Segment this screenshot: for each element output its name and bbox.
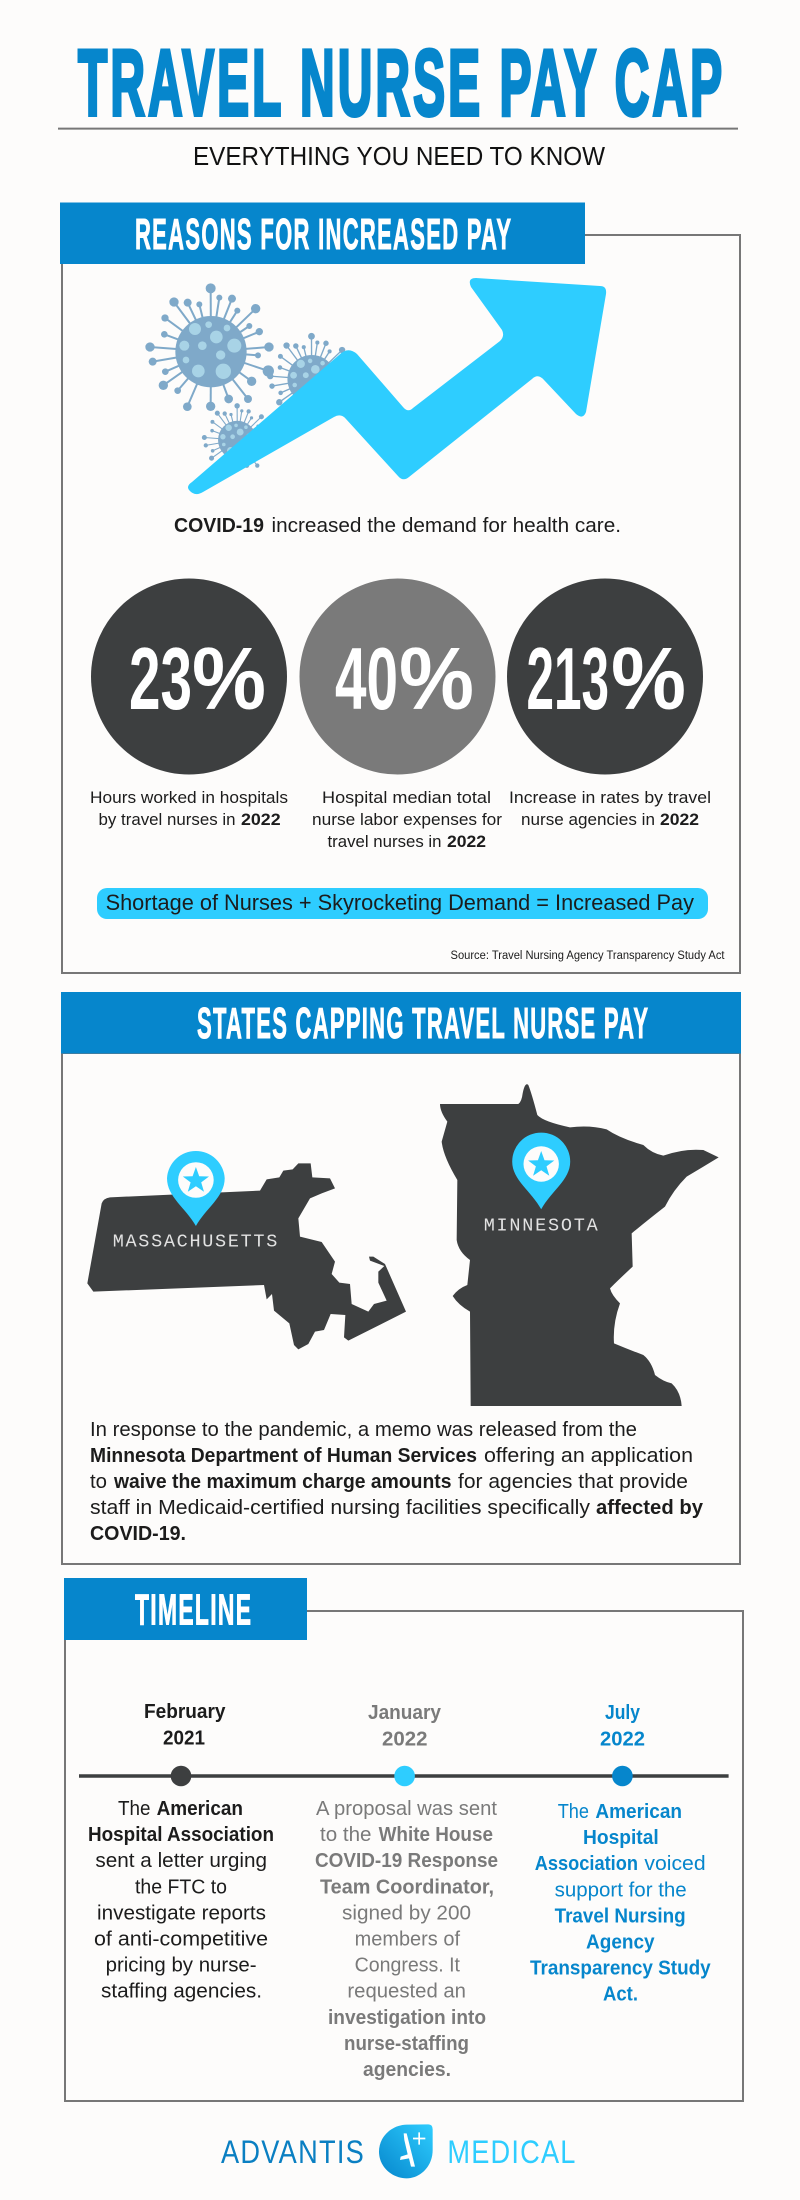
heading: reasons for increased pay: REASONS FOR INCREASED PAY (135, 211, 511, 259)
event: january 2022: COVID-19 Response (315, 1850, 498, 1872)
label: minnesota: MINNESOTA (484, 1216, 599, 1237)
event: january 2022: to the (320, 1824, 372, 1846)
text block: memo paragraph: offering an application (484, 1445, 693, 1467)
icon: coronavirus cluster (145, 283, 355, 472)
stat: 40% (300, 578, 502, 851)
event: january 2022: investigation into (328, 2007, 486, 2029)
event: july 2022: Transparency Study (530, 1958, 712, 1980)
stat: 40%: 40 (335, 629, 398, 728)
panel: reasons for increased pay (60, 202, 740, 973)
text block: memo paragraph: COVID-19. (90, 1523, 186, 1545)
event: july 2022: July (605, 1702, 641, 1724)
text block: memo paragraph: for agencies that provide (458, 1471, 688, 1493)
heading: timeline: TIMELINE (135, 1586, 251, 1635)
source note: Source: Travel Nursing Agency Transparency Study Act (450, 950, 725, 962)
stat: 213% (507, 578, 711, 829)
event: july 2022: Travel Nursing (555, 1905, 686, 1927)
stat: 40%: nurse labor expenses for (312, 810, 502, 829)
event: july 2022: The (558, 1801, 589, 1823)
stat: 40%: travel nurses in (328, 832, 442, 851)
event: february 2021: of anti-competitive (94, 1928, 268, 1950)
event: january 2022: White House (379, 1824, 493, 1846)
event: january 2022: Team Coordinator, (320, 1876, 494, 1898)
title: TRAVEL NURSE PAY CAP (78, 29, 722, 135)
text block: memo paragraph (90, 1419, 704, 1545)
stat: 23%: by travel nurses in (98, 810, 236, 829)
timeline axis (79, 1774, 729, 1778)
stat: 23%: % (192, 629, 266, 728)
text block: memo paragraph: Minnesota Department of Human Services (90, 1445, 477, 1467)
event: july 2022: voiced (644, 1853, 706, 1875)
event: january 2022: nurse-staffing (344, 2033, 469, 2055)
event: january 2022: signed by 200 (342, 1902, 471, 1924)
stat: 213%: 2022 (660, 810, 699, 829)
event: january 2022: requested an (347, 1981, 466, 2003)
stat: 213%: Increase in rates by travel (509, 788, 711, 807)
icon: minnesota pin (512, 1133, 570, 1209)
heading: timeline (64, 1578, 307, 1640)
event: january 2022 (315, 1702, 498, 2081)
heading: reasons for increased pay (60, 202, 585, 264)
event: january 2022: members of (355, 1928, 460, 1950)
heading: states capping travel nurse pay (61, 992, 741, 1054)
event: february 2021: the FTC to (135, 1876, 227, 1898)
heading: states capping travel nurse pay: STATES CAPPING TRAVEL NURSE PAY (197, 1000, 648, 1048)
event: july 2022 (530, 1702, 712, 2006)
panel: timeline (64, 1578, 743, 2101)
panel: states capping travel nurse pay (61, 992, 741, 1564)
event: july 2022: 2022 (600, 1729, 645, 1751)
text block: memo paragraph: In response to the pandemic, a memo was released from the (90, 1419, 637, 1441)
event: february 2021: February (144, 1701, 226, 1723)
event: february 2021: American (157, 1798, 243, 1820)
event: july 2022: Hospital (583, 1827, 659, 1849)
event: february 2021 (88, 1701, 274, 2003)
event: february 2021: The (118, 1798, 150, 1820)
event: february 2021: sent a letter urging (95, 1850, 267, 1872)
subtitle: EVERYTHING YOU NEED TO KNOW (193, 141, 605, 171)
event: february 2021: investigate reports (97, 1902, 266, 1924)
event: january 2022: A proposal was sent (316, 1798, 497, 1820)
text block: memo paragraph: to (90, 1471, 107, 1493)
stat: 40%: % (399, 629, 474, 728)
callout: shortage equation: Shortage of Nurses + Skyrocketing Demand = Increased Pay (106, 890, 694, 915)
event: february 2021: 2021 (163, 1728, 205, 1750)
event: january 2022: January (368, 1702, 442, 1724)
logo: advantis medical: MEDICAL (447, 2135, 575, 2171)
text block: memo paragraph: affected by (596, 1497, 704, 1519)
stat: 23% (90, 578, 288, 829)
event: july 2022: Act. (603, 1984, 638, 2006)
event: january 2022: agencies. (363, 2059, 451, 2081)
covid statement: COVID-19 (174, 515, 264, 537)
stat: 23%: Hours worked in hospitals (90, 788, 288, 807)
stat: 23%: 2022 (241, 810, 281, 829)
stat: 213%: nurse agencies in (521, 810, 655, 829)
map: massachusetts (87, 1151, 406, 1349)
icon: massachusetts pin (167, 1151, 225, 1226)
icon: logo shield (379, 2124, 433, 2178)
event: february 2021: pricing by nurse- (106, 1955, 257, 1977)
event: july 2022: American (595, 1801, 682, 1823)
label: massachusetts: MASSACHUSETTS (113, 1232, 277, 1253)
covid statement: increased the demand for health care. (272, 515, 621, 537)
event: july 2022: support for the (555, 1879, 687, 1901)
event: january 2022: Congress. It (355, 1955, 460, 1977)
event: february 2021: Hospital Association (88, 1824, 274, 1846)
event: july 2022: Association (535, 1853, 638, 1875)
stat: 40%: Hospital median total (322, 788, 491, 807)
event: july 2022: Agency (586, 1932, 655, 1954)
logo: advantis medical: ADVANTIS (221, 2135, 364, 2171)
icon: rising arrow (188, 278, 606, 494)
logo: advantis medical (221, 2124, 575, 2178)
stat: 23%: 23 (129, 629, 192, 728)
event: january 2022: 2022 (382, 1729, 428, 1751)
map: minnesota (440, 1084, 719, 1406)
stat: 213%: 213 (526, 629, 609, 728)
text block: memo paragraph: waive the maximum charge amounts (113, 1471, 452, 1493)
stat: 213%: % (611, 629, 686, 728)
event: february 2021: staffing agencies. (101, 1981, 262, 2003)
stat: 40%: 2022 (447, 832, 486, 851)
text block: memo paragraph: staff in Medicaid-certified nursing facilities specifically (90, 1497, 590, 1519)
